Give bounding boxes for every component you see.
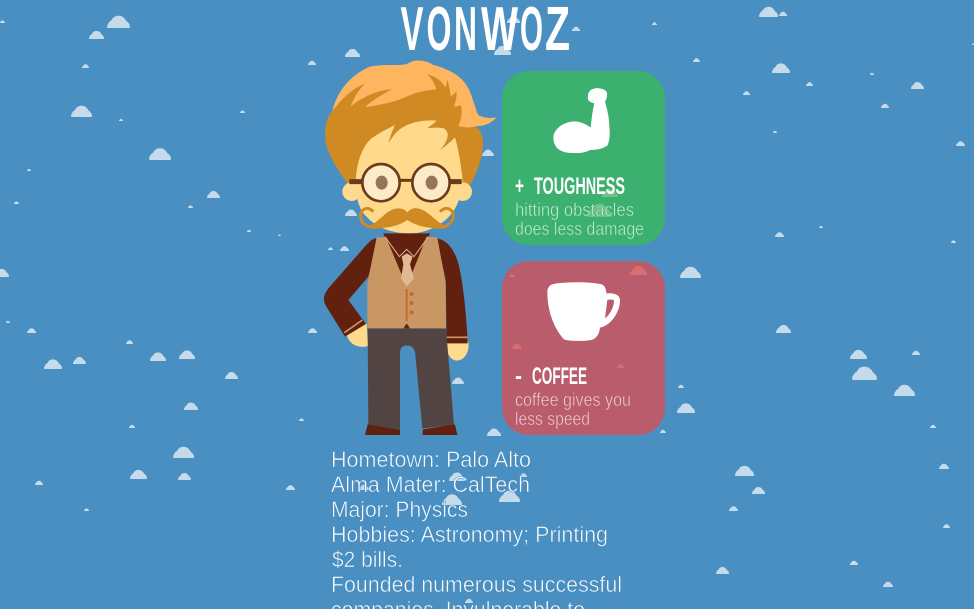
icon: flexed arm	[553, 88, 610, 153]
coffee heading: -	[515, 363, 522, 390]
shoes	[365, 424, 457, 435]
toughness description	[515, 200, 644, 239]
toughness description: does less damage	[515, 219, 644, 239]
hands	[347, 323, 469, 361]
tinted clouds behind toughness text	[587, 188, 618, 217]
sleeves	[324, 238, 468, 343]
cuffs	[344, 320, 468, 337]
toughness heading: TOUGHNESS	[534, 173, 625, 200]
toughness description: hitting obstacles	[515, 200, 634, 220]
icon: coffee cup	[547, 282, 620, 341]
biography text block	[331, 447, 622, 609]
tinted clouds on coffee panel	[509, 266, 647, 368]
toughness heading	[515, 173, 625, 200]
shirt	[383, 233, 430, 290]
character body	[324, 233, 469, 435]
coffee description: less speed	[515, 409, 590, 429]
coffee heading	[515, 363, 587, 390]
biography text block: Hobbies: Astronomy; Printing	[331, 522, 608, 547]
character illustration	[324, 61, 497, 435]
biography text block: Alma Mater: CalTech	[331, 472, 530, 497]
coffee description	[515, 390, 631, 429]
biography text block: Hometown: Palo Alto	[331, 447, 531, 472]
vest	[367, 237, 446, 328]
biography text block: Founded numerous successful	[331, 572, 622, 597]
collar	[385, 237, 428, 257]
coffee description: coffee gives you	[515, 390, 631, 410]
character hair	[325, 61, 497, 192]
character face	[356, 120, 462, 233]
character moustache	[361, 208, 453, 228]
character glasses	[349, 164, 462, 201]
coffee heading: COFFEE	[532, 363, 587, 390]
vest buttons	[406, 289, 414, 321]
character ears	[342, 182, 472, 201]
vest notch	[403, 323, 410, 328]
tie	[401, 253, 414, 287]
biography text block: Major: Physics	[331, 497, 468, 522]
toughness heading: +	[515, 173, 524, 200]
panel: toughness	[502, 71, 665, 245]
biography text block: $2 bills.	[332, 547, 403, 572]
trousers	[368, 328, 454, 430]
panel: coffee	[502, 261, 665, 435]
